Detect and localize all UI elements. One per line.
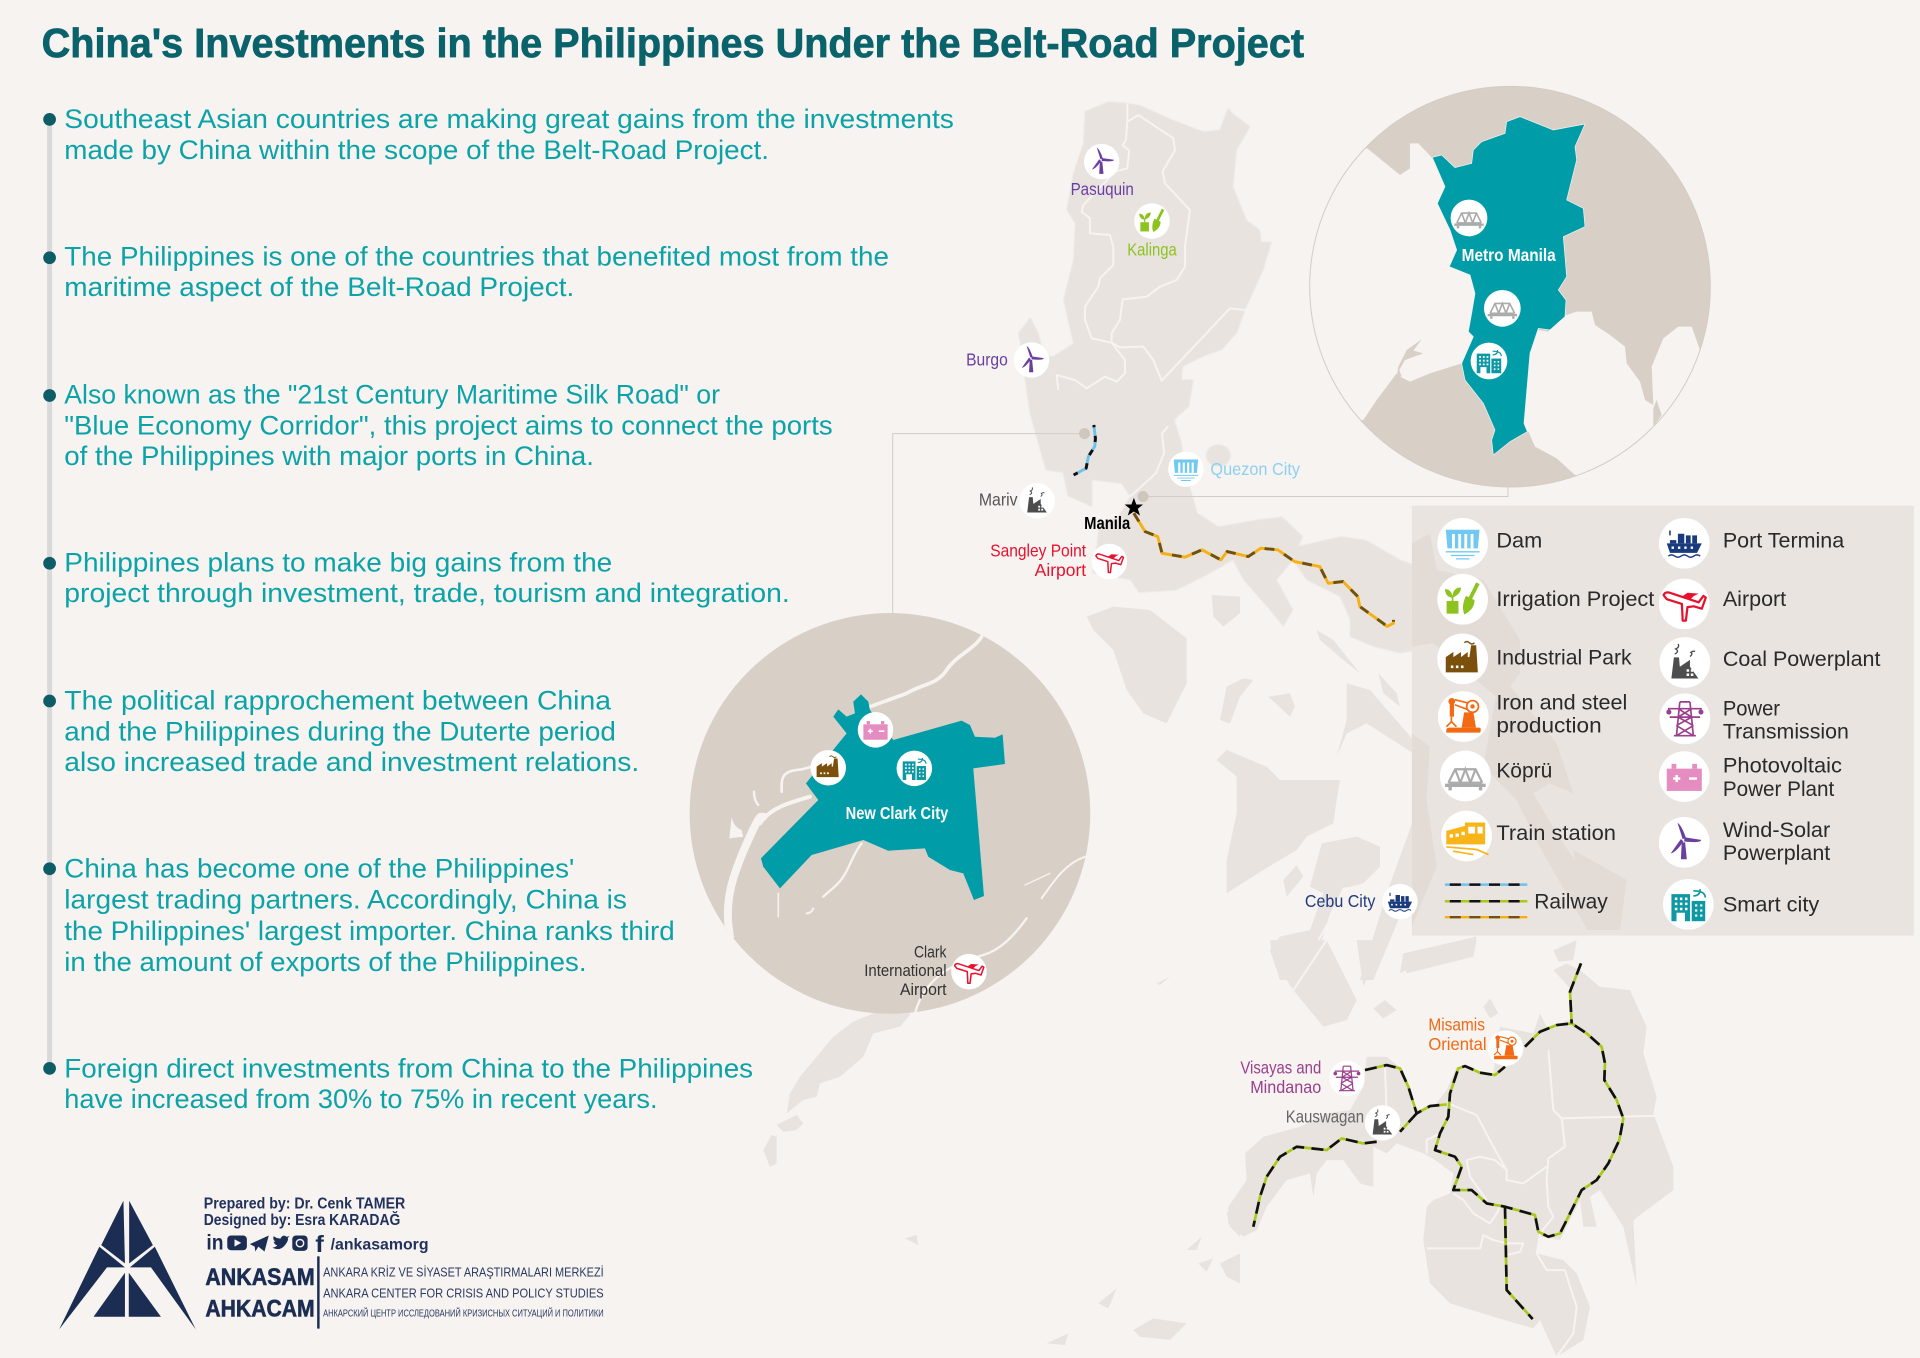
bullet 2: maritime aspect of the Belt-Road Project. bbox=[64, 272, 574, 302]
bullet 6: the Philippines' largest importer. China ranks third bbox=[64, 916, 675, 946]
Metro Manila bridge icon 2 bbox=[1484, 290, 1521, 327]
legend labels: Power Plant bbox=[1723, 778, 1834, 801]
bullet 1: Southeast Asian countries are making great gains from the investments bbox=[64, 104, 954, 134]
panel: legend bbox=[1412, 506, 1914, 936]
bullet 7 bbox=[43, 1053, 753, 1114]
legend labels: Airport bbox=[1723, 588, 1786, 611]
map marker: Burgo bbox=[966, 342, 1049, 378]
legend labels: Iron and steel bbox=[1496, 691, 1627, 714]
legend labels: Irrigation Project bbox=[1496, 588, 1655, 611]
label: Clark International Airport: Clark bbox=[914, 942, 947, 961]
footer: social media icons: f bbox=[315, 1231, 324, 1257]
legend labels: Transmission bbox=[1723, 721, 1849, 744]
map: Manila coastline border bbox=[1130, 426, 1168, 497]
legend labels: Power bbox=[1723, 697, 1780, 720]
map marker: Burgo: Burgo bbox=[966, 350, 1008, 370]
footer: ANKASAM wordmark: ANKASAM bbox=[205, 1264, 315, 1291]
legend labels: Dam bbox=[1496, 530, 1542, 553]
map: Mindanao borders and railway bbox=[1253, 940, 1655, 1357]
footer: social handle: /ankasamorg bbox=[331, 1236, 429, 1253]
map marker: Kauswagan bbox=[1286, 1105, 1400, 1141]
map marker: Pasuquin: Pasuquin bbox=[1071, 179, 1134, 199]
bullet 4: project through investment, trade, tourism and integration. bbox=[64, 578, 790, 608]
inset: New Clark City circle bbox=[690, 613, 1090, 1014]
map marker: Mariv: Mariv bbox=[979, 490, 1018, 510]
footer: organisation names: ANKARA CENTER FOR CRISIS AND POLICY STUDIES bbox=[323, 1285, 604, 1300]
label: New Clark City: New Clark City bbox=[846, 803, 949, 823]
legend item: power transmission bbox=[1660, 693, 1710, 744]
bullet 2 bbox=[43, 241, 889, 302]
label: Metro Manila: Metro Manila bbox=[1462, 245, 1556, 265]
legend item: coal powerplant bbox=[1660, 637, 1710, 688]
footer: social media icons bbox=[206, 1231, 324, 1257]
legend labels: Train station bbox=[1496, 822, 1616, 845]
footer: ANKASAM logo bbox=[59, 1201, 196, 1329]
bullet 7: Foreign direct investments from China to the Philippines bbox=[64, 1053, 753, 1083]
railway: blue Clark line bbox=[1074, 425, 1095, 475]
map: Luzon land bbox=[1018, 102, 1433, 653]
map marker: Visayas and Mindanao: Visayas and bbox=[1240, 1057, 1321, 1077]
bullet 5: The political rapprochement between China bbox=[64, 685, 611, 715]
map marker: Quezon City: Quezon City bbox=[1210, 459, 1300, 479]
footer: divider bbox=[317, 1256, 320, 1329]
map: Visayas islands bbox=[1087, 595, 1477, 980]
bullet 5: and the Philippines during the Duterte period bbox=[64, 717, 616, 747]
New Clark City battery icon bbox=[858, 712, 893, 748]
Clark International Airport icon bbox=[951, 954, 987, 989]
map marker: Mariv bbox=[979, 483, 1055, 519]
label: Clark International Airport bbox=[864, 942, 947, 999]
connector dot: Manila bbox=[1138, 491, 1149, 502]
legend item: railway swatches bbox=[1445, 885, 1527, 917]
Metro Manila bridge icon 1 bbox=[1451, 200, 1487, 236]
title: China's Investments in the Philippines Under the Belt-Road Project bbox=[42, 20, 1304, 66]
bullet 5: also increased trade and investment relations. bbox=[64, 747, 639, 777]
label: Clark International Airport: Airport bbox=[900, 980, 947, 999]
map marker: Visayas and Mindanao bbox=[1240, 1057, 1365, 1097]
map marker: Cebu City bbox=[1305, 884, 1418, 919]
legend labels: Port Termina bbox=[1723, 530, 1845, 553]
legend item: industrial park bbox=[1437, 633, 1488, 684]
bullet 6: China has become one of the Philippines' bbox=[64, 854, 574, 884]
map marker: Sangley Point Airport bbox=[990, 541, 1127, 580]
legend labels: Photovoltaic bbox=[1723, 755, 1842, 778]
map: Palawan island bbox=[763, 977, 1240, 1345]
bullet 3: of the Philippines with major ports in China. bbox=[64, 441, 594, 471]
legend labels: Industrial Park bbox=[1496, 647, 1632, 670]
legend item: smart city bbox=[1663, 879, 1714, 930]
legend labels: Wind-Solar bbox=[1723, 819, 1830, 842]
legend item: port terminal bbox=[1659, 518, 1710, 569]
bullet 6: in the amount of exports of the Philippines. bbox=[64, 947, 587, 977]
map marker: Sangley Point Airport: Sangley Point bbox=[990, 541, 1086, 561]
New Clark City smart city icon bbox=[897, 751, 932, 786]
footer: social media icons: in bbox=[206, 1232, 224, 1255]
footer: credits bbox=[204, 1195, 405, 1229]
map marker: Cebu City: Cebu City bbox=[1305, 891, 1376, 911]
legend item: iron and steel bbox=[1438, 691, 1489, 742]
legend labels: Smart city bbox=[1723, 893, 1820, 916]
timeline bar bbox=[47, 119, 52, 1068]
legend item: dam bbox=[1437, 518, 1488, 569]
map marker: Misamis Oriental: Misamis bbox=[1428, 1015, 1485, 1035]
map: Luzon province borders bbox=[1057, 103, 1245, 390]
legend item: airport bbox=[1659, 579, 1710, 629]
map marker: Kalinga: Kalinga bbox=[1127, 240, 1177, 260]
bullet 2: The Philippines is one of the countries that benefited most from the bbox=[64, 241, 889, 271]
bullet 6: largest trading partners. Accordingly, China is bbox=[64, 884, 627, 914]
connector line to Metro Manila inset bbox=[1143, 487, 1508, 497]
bullet 4 bbox=[43, 548, 790, 608]
footer: organisation names bbox=[323, 1265, 604, 1320]
map marker: Visayas and Mindanao: Mindanao bbox=[1250, 1077, 1321, 1097]
Metro Manila smart city icon bbox=[1471, 343, 1507, 379]
map marker: Misamis Oriental: Oriental bbox=[1428, 1034, 1487, 1054]
map marker: Kauswagan: Kauswagan bbox=[1286, 1106, 1364, 1126]
bullet 3: Also known as the "21st Century Maritime Silk Road" or bbox=[64, 379, 720, 409]
legend labels: production bbox=[1496, 715, 1602, 738]
connector dot: Clark bbox=[1079, 428, 1090, 439]
map marker: Sangley Point Airport: Airport bbox=[1035, 560, 1086, 580]
footer: credits: Prepared by: Dr. Cenk TAMER bbox=[204, 1195, 405, 1212]
footer: organisation names: АНКАРСКИЙ ЦЕНТР ИССЛЕДОВАНИЙ КРИЗИСНЫХ СИТУАЦИЙ И ПОЛИТИКИ bbox=[323, 1307, 604, 1320]
railway: orange Bicol line bbox=[1134, 513, 1393, 626]
New Clark City factory icon bbox=[810, 750, 846, 786]
legend item: irrigation project bbox=[1437, 574, 1488, 625]
legend item: photovoltaic bbox=[1659, 751, 1710, 802]
bullet 6 bbox=[43, 854, 675, 977]
bullet 3: "Blue Economy Corridor", this project aims to connect the ports bbox=[64, 410, 833, 440]
map marker: Pasuquin bbox=[1071, 144, 1134, 199]
label: Clark International Airport: International bbox=[864, 961, 947, 980]
bullet 1 bbox=[43, 104, 954, 165]
label: Manila: Manila bbox=[1084, 513, 1131, 533]
legend item: bridge bbox=[1440, 751, 1491, 801]
legend labels: Köprü bbox=[1496, 759, 1552, 782]
legend labels bbox=[1496, 530, 1881, 916]
connector line to New Clark City inset bbox=[893, 434, 1085, 613]
legend labels: Railway bbox=[1534, 891, 1608, 914]
map marker: Misamis Oriental bbox=[1428, 1015, 1523, 1066]
map: Mindanao land bbox=[1228, 940, 1673, 1357]
bullet 5 bbox=[43, 685, 639, 777]
legend item: wind-solar bbox=[1659, 817, 1710, 868]
legend labels: Powerplant bbox=[1723, 842, 1830, 865]
legend labels: Coal Powerplant bbox=[1723, 648, 1881, 671]
inset: Metro Manila circle bbox=[1290, 80, 1723, 493]
map marker: Quezon City bbox=[1168, 451, 1300, 487]
bullet 1: made by China within the scope of the Belt-Road Project. bbox=[64, 135, 769, 165]
footer: credits: Designed by: Esra KARADAĞ bbox=[204, 1211, 400, 1229]
legend item: train station bbox=[1441, 811, 1492, 861]
bullet 7: have increased from 30% to 75% in recent years. bbox=[64, 1084, 658, 1114]
bullet 4: Philippines plans to make big gains from the bbox=[64, 548, 612, 578]
map: Polillo island bbox=[1206, 445, 1231, 467]
map marker: Kalinga bbox=[1127, 203, 1177, 260]
footer: organisation names: ANKARA KRİZ VE SİYASET ARAŞTIRMALARI MERKEZİ bbox=[323, 1265, 604, 1280]
bullet 3 bbox=[43, 379, 833, 471]
footer: AHKACAM wordmark: AHKACAM bbox=[205, 1296, 315, 1323]
map marker: Manila star bbox=[1125, 498, 1143, 516]
